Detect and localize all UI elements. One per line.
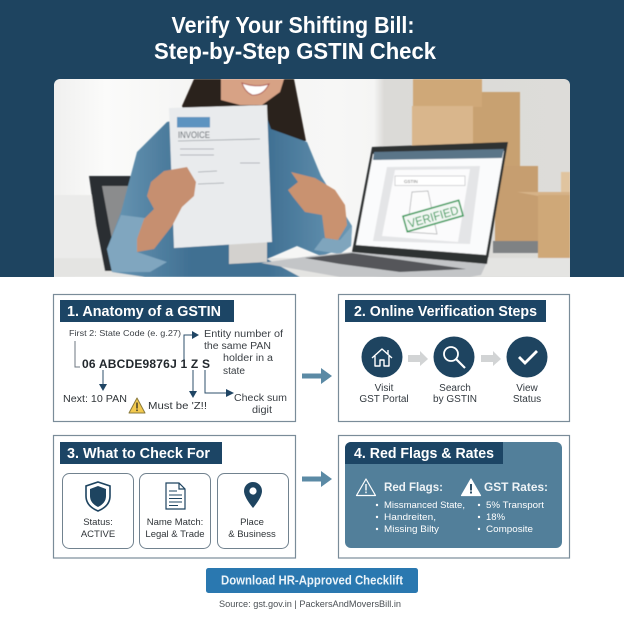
left forearm and hand <box>137 167 196 252</box>
red flags list: Missing Bilty <box>384 524 439 535</box>
download button: Download HR-Approved Checklift <box>221 574 404 588</box>
title: Step-by-Step GSTIN Check <box>154 38 436 64</box>
arrow: panel 3 to 4 <box>302 471 332 487</box>
entity number label: state <box>223 366 245 377</box>
step arrow <box>408 351 428 366</box>
card: status: Status: <box>83 517 113 528</box>
chair <box>89 176 131 271</box>
entity number label: the same PAN <box>204 341 271 352</box>
must be Z label: Must be 'Z!! <box>148 400 207 412</box>
icon: warning triangle <box>129 398 145 413</box>
download button <box>206 568 418 593</box>
icon: solid warning <box>462 479 480 496</box>
photo: woman holding invoice beside laptop <box>54 79 570 277</box>
state code label: First 2: State Code (e. g.27) <box>69 328 181 338</box>
step labels: Status <box>513 394 541 405</box>
red flags list <box>376 480 465 535</box>
check sum label <box>234 393 287 416</box>
card: name match <box>140 474 210 548</box>
step labels: GST Portal <box>359 394 409 405</box>
card: place <box>218 474 288 548</box>
panel 4: red flags and rates <box>338 436 570 558</box>
laptop: GSTIN <box>404 179 418 184</box>
icon: check <box>506 336 548 378</box>
heading 1: 1. Anatomy of a GSTIN <box>67 303 221 320</box>
GST rates list: 5% Transport <box>486 500 544 511</box>
hair <box>182 79 306 141</box>
panel 1: anatomy of a GSTIN <box>54 294 296 422</box>
red flags list: Missmanced State, <box>384 500 465 511</box>
entity number label: holder in a <box>223 353 273 364</box>
heading 3: 3. What to Check For <box>67 445 210 462</box>
laptop <box>261 142 508 277</box>
card: status <box>62 474 134 548</box>
source line: Source: gst.gov.in | PackersAndMoversBill.in <box>219 599 401 609</box>
heading 4: 4. Red Flags & Rates <box>354 445 494 462</box>
GST rates list <box>478 480 548 535</box>
check sum label: Check sum <box>234 393 287 404</box>
panel 3: what to check for <box>54 436 296 558</box>
title <box>154 12 436 64</box>
connector lines and arrows <box>75 335 228 393</box>
GSTIN number: 06 ABCDE9876J 1 Z S <box>82 357 210 371</box>
step arrow <box>481 351 501 366</box>
next PAN label: Next: 10 PAN <box>63 394 127 405</box>
GST rates list: Composite <box>486 524 533 535</box>
icon: outline warning <box>356 479 376 496</box>
entity number label <box>204 329 283 377</box>
entity number label: Entity number of <box>204 329 283 340</box>
GST rates list: GST Rates: <box>484 480 548 494</box>
invoice sheet <box>169 105 272 248</box>
check sum label: digit <box>252 405 272 416</box>
step labels: Search <box>439 383 471 394</box>
denim jacket <box>107 118 352 277</box>
cardboard boxes <box>412 79 570 264</box>
card: name match: Name Match: <box>147 517 203 528</box>
desk <box>54 258 570 277</box>
panel 2: online verification steps <box>338 294 570 422</box>
invoice sheet: INVOICE <box>178 130 210 140</box>
pointing hand <box>288 172 347 240</box>
card: place: & Business <box>228 529 276 540</box>
step labels: by GSTIN <box>433 394 477 405</box>
laptop: VERIFIED <box>406 203 460 231</box>
GST rates list: 18% <box>486 512 506 523</box>
red flags list: Handreiten, <box>384 512 436 523</box>
icon: magnifier <box>434 336 474 378</box>
face <box>221 79 284 105</box>
card: place: Place <box>240 517 264 528</box>
step labels: View <box>516 383 539 394</box>
step labels <box>359 383 541 405</box>
arrow: panel 1 to 2 <box>302 368 332 384</box>
card: name match: Legal & Trade <box>145 529 205 540</box>
header band <box>0 0 624 277</box>
icon: house <box>362 336 402 378</box>
step labels: Visit <box>375 383 394 394</box>
card: status: ACTIVE <box>81 529 115 540</box>
title: Verify Your Shifting Bill: <box>172 12 414 38</box>
heading 2: 2. Online Verification Steps <box>354 303 537 320</box>
red flags list: Red Flags: <box>384 480 443 494</box>
